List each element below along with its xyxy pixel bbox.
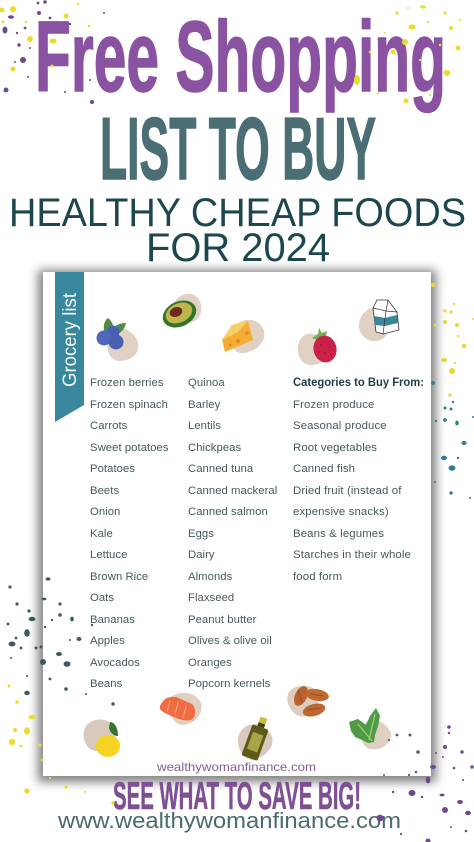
list column: foods two: Almonds <box>188 571 233 583</box>
list column: foods one: Sweet potatoes <box>90 442 169 454</box>
list column: foods two: Lentils <box>188 420 221 432</box>
list column: foods one: Lettuce <box>90 549 127 561</box>
paint splatter: left dark teal <box>7 577 115 706</box>
paint splatter: right yellow <box>431 283 474 397</box>
list column: foods two: Eggs <box>188 528 214 540</box>
paint splatter: lower right purple <box>377 725 474 842</box>
icon: milk carton <box>359 300 399 341</box>
list column: foods one: Carrots <box>90 420 128 432</box>
list column: foods one: Frozen berries <box>90 377 164 389</box>
list column: foods two: Oranges <box>188 657 232 669</box>
paint splatter: lower left yellow <box>8 684 115 805</box>
list column: foods one: Frozen spinach <box>90 399 168 411</box>
list column: foods two: Quinoa <box>188 377 225 389</box>
list column: foods two: Chickpeas <box>188 442 241 454</box>
list column: foods one: Potatoes <box>90 463 135 475</box>
icon: olive oil bottle <box>238 715 273 761</box>
icon: almonds <box>287 684 330 719</box>
paint splatter: top right yellow <box>354 5 461 103</box>
card footer url: wealthywomanfinance.com <box>156 760 316 774</box>
icon: leafy greens <box>349 708 391 749</box>
list column: foods one: Oats <box>90 592 114 604</box>
list column: categories to buy from: Categories to Buy From: <box>293 376 424 389</box>
list column: foods one: Beets <box>90 485 119 497</box>
ribbon: Grocery list <box>55 272 84 422</box>
list column: foods one: Beans <box>90 678 123 690</box>
list column: foods two: Flaxseed <box>188 592 234 604</box>
icon: cheese <box>222 320 264 353</box>
paint splatter: top left yellow <box>0 3 90 71</box>
subtitle: For 2024: FOR 2024 <box>146 226 330 270</box>
list column: foods two: Dairy <box>188 549 215 561</box>
list column: categories to buy from: Dried fruit (instead of <box>293 485 402 497</box>
paint splatter: top left purple <box>2 0 105 104</box>
panel: grocery list card <box>43 272 431 776</box>
ribbon: Grocery list: Grocery list <box>60 292 81 387</box>
icon: avocado <box>158 294 201 333</box>
list column: foods one: Apples <box>90 635 125 647</box>
list column: categories to buy from: Root vegetables <box>293 442 377 454</box>
list column: foods one: Avocados <box>90 657 140 669</box>
list column: categories to buy from: Beans & legumes <box>293 528 384 540</box>
list column: foods one <box>90 377 169 690</box>
list column: categories to buy from: expensive snacks) <box>293 506 389 518</box>
list column: foods one: Onion <box>90 506 120 518</box>
icon: blueberries <box>96 318 138 361</box>
icon: lemon <box>84 720 120 757</box>
list column: foods one: Kale <box>90 528 113 540</box>
list column: foods two <box>188 377 277 690</box>
list column: foods two: Popcorn kernels <box>188 678 271 690</box>
paint splatter: right teal <box>431 381 474 499</box>
list column: foods one: Bananas <box>90 614 135 626</box>
card shadow <box>38 270 436 782</box>
list column: categories to buy from: Starches in their whole <box>293 549 411 561</box>
icon: raspberry <box>298 328 339 365</box>
list column: foods two: Canned salmon <box>188 506 268 518</box>
list column: categories to buy from: food form <box>293 571 342 583</box>
list column: categories to buy from: Seasonal produce <box>293 420 387 432</box>
list column: foods two: Canned mackeral <box>188 485 277 497</box>
list column: foods two: Olives & olive oil <box>188 635 272 647</box>
list column: categories to buy from: Frozen produce <box>293 399 374 411</box>
icon: salmon <box>160 693 202 725</box>
list column: categories to buy from: Canned fish <box>293 463 355 475</box>
list column: foods two: Barley <box>188 399 221 411</box>
list column: foods two: Canned tuna <box>188 463 254 475</box>
list column: categories to buy from <box>293 376 424 583</box>
website url: www.wealthywomanfinance.com <box>57 808 401 833</box>
list column: foods two: Peanut butter <box>188 614 257 626</box>
list column: foods one: Brown Rice <box>90 571 148 583</box>
